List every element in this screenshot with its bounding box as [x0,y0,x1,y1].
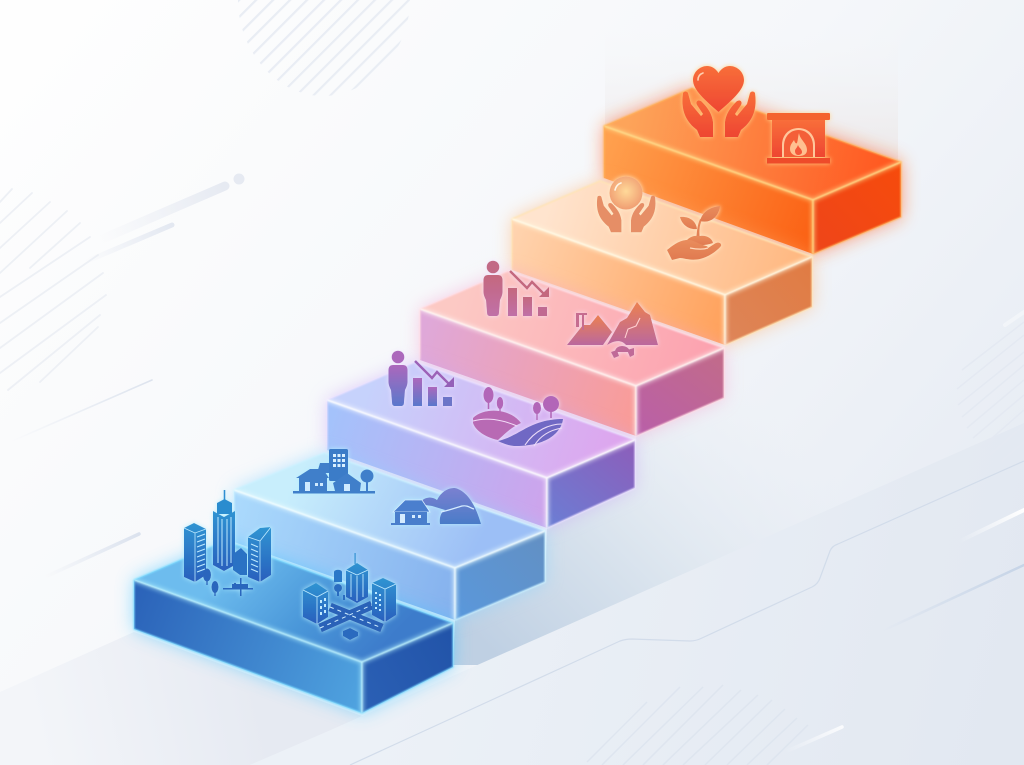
background hatch bottom [587,685,808,765]
background hatch circle top [238,0,410,96]
step 2: light blue [234,449,545,620]
background streaks [10,174,1024,752]
step 6: orange-red [604,66,901,254]
icon: house and hill [391,488,481,525]
step 1: deep blue [134,490,453,713]
icon: village houses [293,449,375,494]
icon: mountains with rockfall [567,302,658,358]
icon: person with declining bar chart [484,261,549,316]
icon: rolling farmland with trees [473,387,563,446]
icon: person with declining bar chart [388,351,454,406]
icon: fireplace [767,113,830,164]
icon: heart held in hands [682,66,756,137]
icon: orb held in hands [597,176,655,232]
background hatch left [0,189,106,390]
background hatch right [957,322,1024,461]
step 5: peach orange [512,176,812,345]
step 4: rose pink [420,261,724,436]
step 3: violet [327,351,635,528]
circuit line [350,461,1024,765]
icon: downtown skyscrapers [184,490,271,596]
icon: seedling in open hand [667,206,721,260]
icon: city crossroads [303,553,396,640]
